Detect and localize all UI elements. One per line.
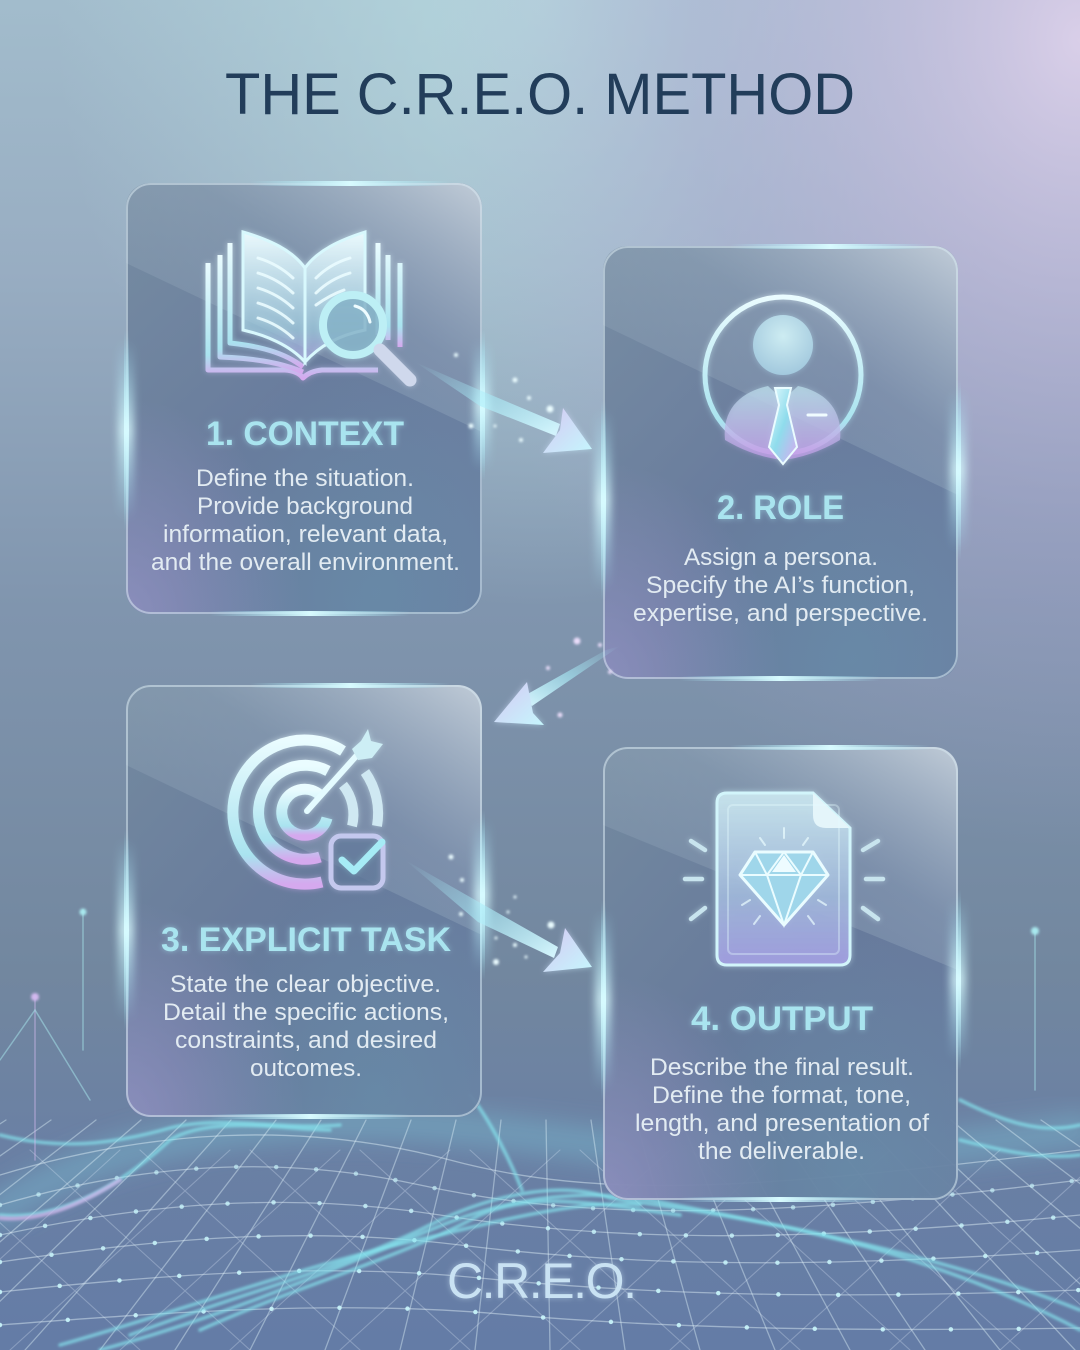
title: THE C.R.E.O. METHOD: [225, 62, 855, 127]
body text: length, and presentation of: [635, 1110, 929, 1137]
body text: information, relevant data,: [163, 521, 448, 548]
body text: Define the situation.: [196, 465, 414, 492]
heading: 1. CONTEXT: [206, 415, 404, 453]
body text: Provide background: [197, 493, 413, 520]
icon: target with arrow and checkbox: [233, 729, 383, 888]
panel: output: [595, 745, 966, 1202]
panel: role: [595, 244, 966, 681]
heading: 3. EXPLICIT TASK: [161, 921, 451, 959]
network mesh landscape: [0, 908, 1080, 1350]
heading: 4. OUTPUT: [691, 1000, 873, 1038]
icon: document with diamond: [685, 793, 883, 965]
body text: [633, 544, 928, 627]
icon: person in circle: [705, 297, 861, 464]
panel: context: [118, 181, 490, 616]
heading: 2. ROLE: [717, 489, 844, 527]
body text: [635, 1054, 929, 1165]
icon: open book with magnifier: [208, 232, 410, 380]
body text: and the overall environment.: [151, 549, 460, 576]
body text: State the clear objective.: [170, 971, 441, 998]
arrow: context to role: [415, 353, 592, 453]
body text: expertise, and perspective.: [633, 600, 928, 627]
body text: [163, 971, 449, 1082]
body text: the deliverable.: [698, 1138, 865, 1165]
body text: [151, 465, 460, 576]
body text: Detail the specific actions,: [163, 999, 449, 1026]
arrow: role to explicit task: [494, 638, 620, 725]
footer logo: C.R.E.O.: [447, 1253, 637, 1309]
body text: Assign a persona.: [684, 544, 878, 571]
body text: constraints, and desired: [175, 1027, 437, 1054]
body text: outcomes.: [250, 1055, 362, 1082]
arrow: explicit task to output: [405, 854, 592, 972]
panel: explicit task: [118, 683, 490, 1119]
body text: Describe the final result.: [650, 1054, 914, 1081]
body text: Define the format, tone,: [652, 1082, 911, 1109]
body text: Specify the AI’s function,: [646, 572, 915, 599]
